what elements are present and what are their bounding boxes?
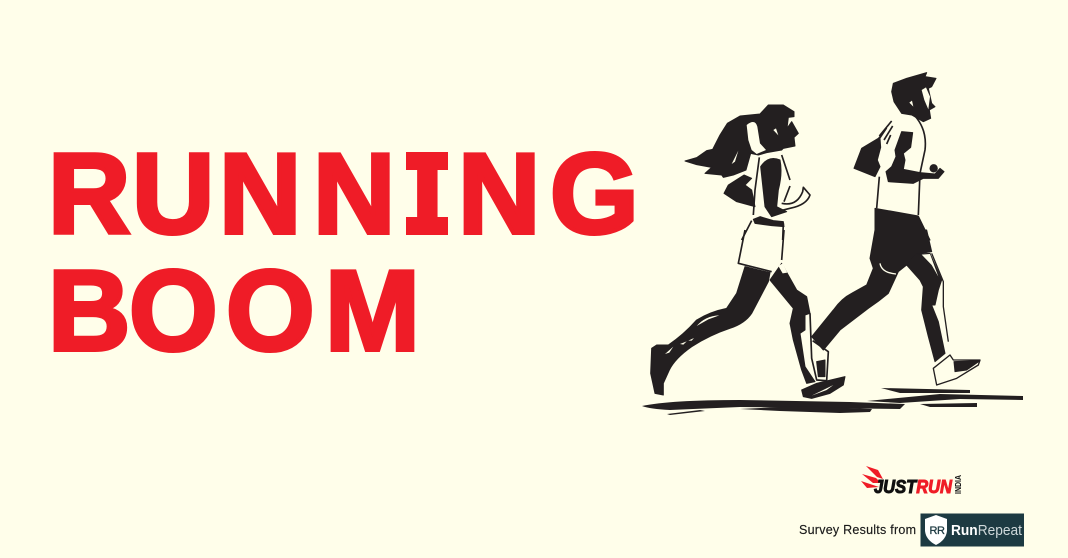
woman upper body [685, 105, 810, 240]
logo: Just Run: JUSTRUN [874, 477, 953, 497]
man upper body [854, 73, 944, 240]
title: Running Boom: RUNNING [48, 131, 639, 258]
woman legs and shoes [651, 230, 845, 398]
man legs and shoes [812, 230, 980, 385]
ground strokes [642, 388, 1023, 415]
logo: Just Run [861, 466, 963, 497]
icon: red burst [861, 466, 883, 488]
source credit text: Survey Results from [799, 523, 916, 537]
logo: RunRepeat [920, 514, 1024, 546]
title: Running Boom: BOOM [48, 248, 420, 375]
logo: RunRepeat: RR [930, 525, 945, 537]
logo: Just Run: INDIA [954, 475, 963, 494]
title: Running Boom [48, 131, 639, 375]
illustration: woman runner [642, 73, 1023, 415]
icon: shield [925, 515, 947, 545]
logo: RunRepeat: RunRepeat [951, 522, 1023, 539]
